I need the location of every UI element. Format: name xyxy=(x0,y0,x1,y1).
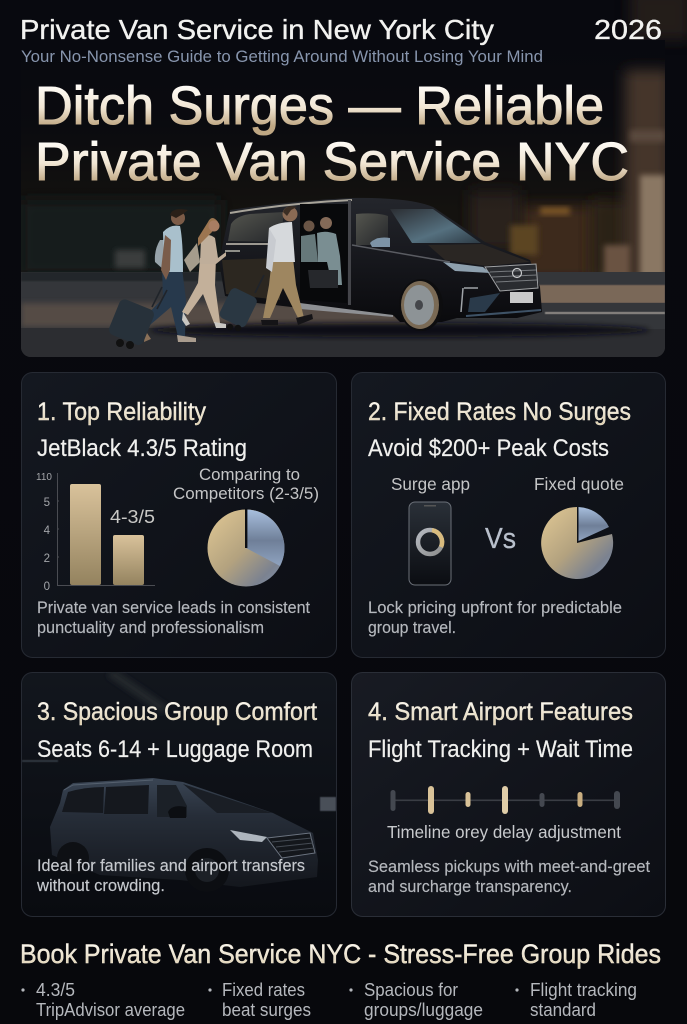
van side windows xyxy=(62,787,104,813)
van grille xyxy=(267,833,315,858)
bar chart: 4 xyxy=(44,525,51,537)
bar chart: 4-3/5 xyxy=(110,507,155,527)
pie chart: competitors xyxy=(208,508,284,586)
bullet: spacious: groups/luggage xyxy=(364,1000,483,1020)
hero headline xyxy=(35,76,629,192)
van windshield xyxy=(183,784,272,813)
panel 1 description xyxy=(37,599,310,637)
front side window xyxy=(356,213,388,245)
vs label: Vs xyxy=(485,523,516,555)
bullet: fixed rates: beat surges xyxy=(222,1000,311,1020)
panel 4 description: and surcharge transparency. xyxy=(368,878,572,896)
van xyxy=(219,198,542,331)
bullet: rating: 4.3/5 xyxy=(36,980,75,1000)
panel 4 subheading: Flight Tracking + Wait Time xyxy=(368,736,633,763)
hero headline: Private Van Service NYC xyxy=(35,132,629,192)
panel 1 subheading: JetBlack 4.3/5 Rating xyxy=(37,435,247,462)
timeline xyxy=(390,786,620,814)
panel 3 description: without crowding. xyxy=(36,877,165,895)
top right corner glow xyxy=(630,0,687,40)
panel 4 description: Seamless pickups with meet-and-greet xyxy=(368,858,650,876)
bar chart xyxy=(36,472,155,593)
panel 4: airport features xyxy=(352,672,666,916)
panel 2 heading: 2. Fixed Rates No Surges xyxy=(368,398,631,426)
panel 2 description: group travel. xyxy=(368,619,456,637)
bullet: spacious xyxy=(349,980,483,1020)
passenger: man in white shirt with suitcase xyxy=(218,206,313,331)
grille xyxy=(485,264,538,291)
pie chart label: Competitors (2-3/5) xyxy=(173,484,319,503)
pie chart: fixed quote xyxy=(541,507,613,579)
year: 2026 xyxy=(594,14,662,45)
panel 2 description: Lock pricing upfront for predictable xyxy=(368,599,622,617)
bar chart: 2 xyxy=(44,553,50,565)
panel 3 description xyxy=(36,857,305,895)
license plate xyxy=(510,292,533,303)
hood xyxy=(428,244,530,266)
panel 2 description xyxy=(368,599,622,637)
windshield xyxy=(390,209,481,243)
panel 3 heading: 3. Spacious Group Comfort xyxy=(37,698,317,726)
panel 4 description xyxy=(368,858,650,896)
top title: Private Van Service in New York City xyxy=(20,14,494,45)
panel 1 description: Private van service leads in consistent xyxy=(37,599,310,617)
pie chart label xyxy=(173,465,319,503)
panel 1 description: punctuality and professionalism xyxy=(37,619,264,637)
bar chart: 0 xyxy=(44,581,50,593)
van body xyxy=(219,198,542,322)
panel 4 heading: 4. Smart Airport Features xyxy=(368,698,633,726)
panel 1: top reliability xyxy=(22,372,336,658)
panel 1 heading: 1. Top Reliability xyxy=(37,398,206,426)
surge app label: Surge app xyxy=(391,474,470,494)
hero photo panel: van and passengers xyxy=(21,40,670,360)
van photo xyxy=(22,672,336,892)
icon: phone with ring xyxy=(409,502,451,585)
bullet: rating: TripAdvisor average xyxy=(36,1000,185,1020)
panel 3 description: Ideal for families and airport transfers xyxy=(37,857,305,875)
timeline caption: Timeline orey delay adjustment xyxy=(387,822,621,842)
panel 3: spacious comfort xyxy=(22,672,336,916)
hero background: blurred city street xyxy=(21,40,670,360)
hero headline: Ditch Surges — Reliable xyxy=(35,76,604,136)
mirror xyxy=(370,238,390,247)
pie chart label: Comparing to xyxy=(199,465,300,484)
bullet: flight tracking xyxy=(515,980,637,1020)
bullet: flight tracking: standard xyxy=(530,1000,596,1020)
passenger: man with suitcase xyxy=(107,209,196,349)
panel 3 subheading: Seats 6-14 + Luggage Room xyxy=(37,736,313,763)
bullet: rating xyxy=(21,980,185,1020)
van mirror xyxy=(168,806,186,818)
panel 2 subheading: Avoid $200+ Peak Costs xyxy=(368,435,609,462)
bar chart: 110 xyxy=(36,472,52,483)
open door cabin xyxy=(300,200,393,317)
fixed quote label: Fixed quote xyxy=(534,474,624,494)
rear side window xyxy=(228,212,284,242)
bullet: spacious: Spacious for xyxy=(364,980,458,1000)
road xyxy=(21,272,665,360)
bullet: flight tracking: Flight tracking xyxy=(530,980,637,1000)
headlight xyxy=(443,262,490,273)
panel 2: fixed rates xyxy=(352,372,666,658)
passenger: woman xyxy=(182,218,240,328)
bar chart: 5 xyxy=(44,497,50,509)
van headlight xyxy=(230,830,267,842)
bullet: fixed rates: Fixed rates xyxy=(222,980,305,1000)
subtitle: Your No-Nonsense Guide to Getting Around Without Losing Your Mind xyxy=(21,47,543,66)
front wheel xyxy=(401,279,439,329)
bullet: fixed rates xyxy=(208,980,311,1020)
